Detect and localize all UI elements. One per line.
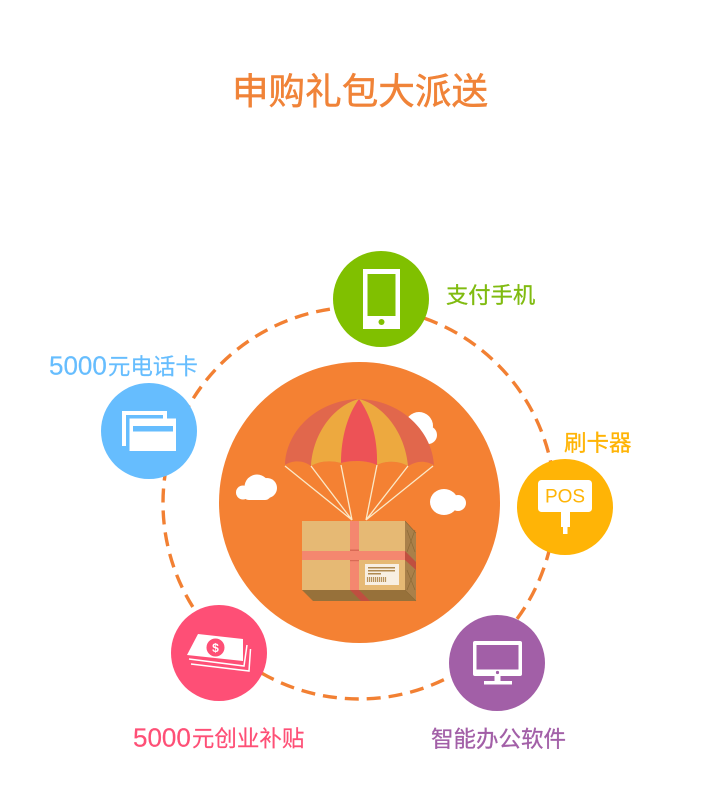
node: POS (amber): [517, 459, 613, 555]
node: computer (purple): [449, 615, 545, 711]
label: phone: 支付手机: [446, 283, 535, 308]
icon: banknotes: $: [212, 641, 219, 655]
icon: mobile phone: [363, 269, 400, 329]
central orange circle with parachute illustration: [219, 362, 500, 643]
box label: [365, 564, 399, 585]
node: phone (green): [333, 251, 429, 347]
icon: cardboard box: [302, 521, 416, 601]
label: subsidy: 5000元创业补贴: [133, 722, 304, 752]
icon: POS terminal: POS: [545, 486, 585, 508]
icon: clouds: [236, 412, 466, 515]
icon: parachute cords: [285, 465, 433, 520]
icon: parachute canopy: [285, 399, 434, 466]
node: subsidy (pink): [171, 605, 267, 701]
label: computer: 智能办公软件: [431, 727, 566, 752]
title: 申购礼包大派送: [232, 71, 488, 112]
label: phone card: 5000元电话卡: [49, 350, 198, 380]
icon: cards: [122, 411, 176, 451]
node: phone card (blue): [101, 383, 197, 479]
label: POS: 刷卡器: [564, 431, 632, 456]
icon: monitor: [473, 641, 522, 684]
dashed orbit ring: [163, 307, 555, 699]
